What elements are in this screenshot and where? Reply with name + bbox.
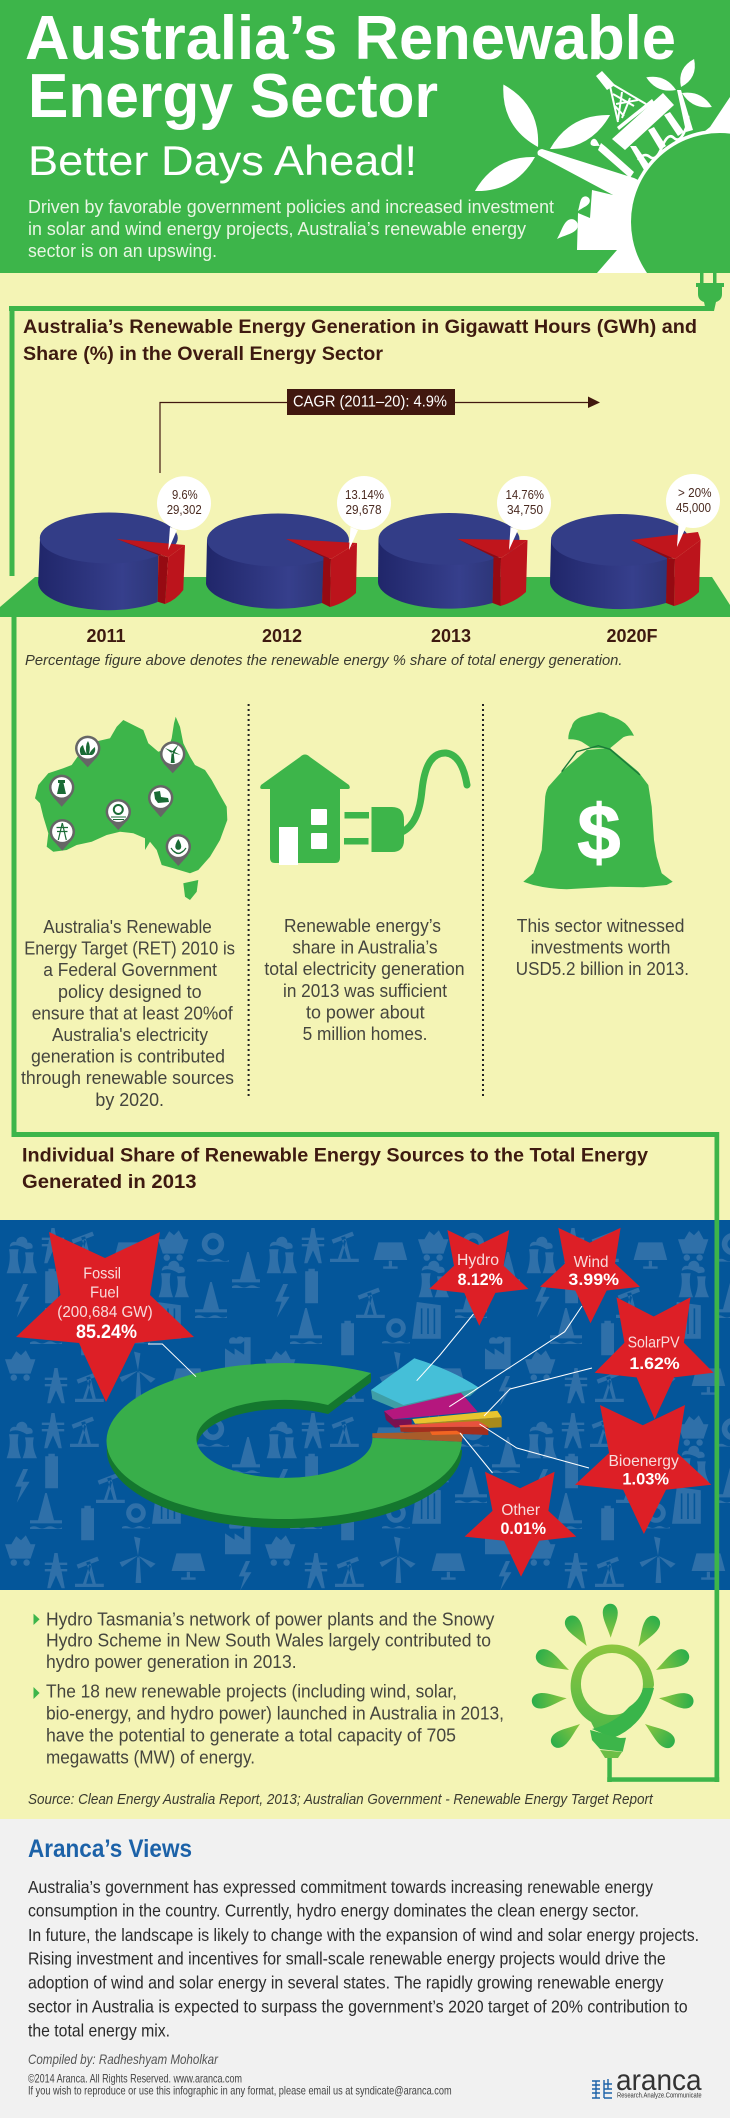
star: bioenergy: 1.03% [622,1469,669,1488]
intro text block: Driven by favorable government policies and increased investment [28,197,554,217]
icon: bullet arrow [34,1687,40,1699]
year labels: 2020F [606,626,658,646]
callout: 2020F value bubble: 45,000 [676,500,711,515]
star: fossil fuel [16,1232,194,1402]
callout: CAGR: CAGR (2011–20): 4.9% [293,394,447,410]
title [25,4,676,131]
text block: hydro bullet [34,1609,494,1672]
copyright: If you wish to reproduce or use this infographic in any format, please email us at syndicate@aranca.com [28,2084,452,2098]
callout: 2012 value bubble [337,476,391,550]
text block: Renewable Energy Target: ensure that at least 20%of [32,1003,234,1023]
chart: hydro slice [371,1358,479,1412]
pin: pylon [50,819,75,851]
text block: views paragraph: Australia’s government has expressed commitment towards increasing renewable energy [28,1877,653,1897]
icon: wind turbine tree on globe with oil rig [475,59,730,273]
star: hydro: Hydro [457,1252,499,1269]
logo: aranca: aranca [616,2064,702,2097]
year labels: 2012 [262,626,302,646]
text block: views paragraph: consumption in the country. Currently, hydro energy dominates the clean energy sector. [28,1901,639,1921]
text block: share of electricity: total electricity generation [264,959,465,979]
text block: Renewable Energy Target: a Federal Government [43,960,217,980]
text block: views paragraph: the total energy mix. [28,2020,170,2040]
callout: 2011 value bubble: 29,302 [167,502,202,517]
callout: 2020F value bubble: > 20% [678,485,712,500]
icon: house with plug [260,753,467,865]
callout: 2011 value bubble [157,476,211,550]
heading: individual share: Generated in 2013 [22,1172,196,1193]
text block: Renewable Energy Target: Australia's Renewable [43,917,212,937]
star: other [465,1472,576,1577]
text block: views paragraph: Rising investment and incentives for small-scale renewable energy projects would drive the [28,1949,666,1969]
arrow: CAGR growth arrow [160,396,600,473]
icon: bullet arrow [34,1614,40,1625]
chart: 2013 pie [378,476,551,609]
star: hydro: 8.12% [458,1270,503,1289]
year labels: 2011 [86,626,126,646]
year labels [86,626,658,646]
chart: other slice [372,1431,463,1442]
text block: investments: This sector witnessed [517,916,684,936]
text block: Renewable Energy Target: generation is contributed [31,1047,225,1067]
callout: 2012 value bubble: 29,678 [346,502,382,517]
text block: hydro bullet: Hydro Tasmania’s network of power plants and the Snowy [46,1609,494,1629]
star: wind: 3.99% [568,1270,619,1289]
icon: Australia map with energy pins [35,717,227,900]
star: solar PV: SolarPV [628,1335,680,1352]
intro text block [28,197,554,261]
callout: CAGR [287,389,455,415]
heading: generation chart: Share (%) in the Overall Energy Sector [23,344,384,365]
heading: generation chart: Australia’s Renewable Energy Generation in Gigawatt Hours (GWh) and [23,317,697,338]
text block: Renewable Energy Target [21,917,235,1110]
title: Australia’s Renewable [25,4,676,73]
intro text block: in solar and wind energy projects, Australia’s renewable energy [28,219,526,239]
copyright [28,2072,452,2098]
callout: 2012 value bubble: 13.14% [345,487,384,502]
icon: light bulb of leaves [531,1604,694,1758]
text block: share of electricity: to power about [306,1002,425,1022]
text block: projects bullet: have the potential to generate a total capacity of 705 [46,1726,456,1746]
star: other: Other [501,1502,541,1519]
source note: Source: Clean Energy Australia Report, 2013; Australian Government - Renewable Energy Target Report [28,1791,653,1808]
title: Energy Sector [28,62,438,131]
star: solar PV: 1.62% [629,1354,680,1373]
chart: bioenergy slice [399,1421,488,1435]
chart footnote: Percentage figure above denotes the renewable energy % share of total energy generation. [25,652,622,669]
compiled by: Compiled by: Radheshyam Moholkar [28,2051,219,2067]
pin: bioenergy leaf [75,736,100,767]
star: fossil fuel: (200,684 GW) [57,1304,153,1321]
subtitle: Better Days Ahead! [28,137,417,184]
text block: investments: USD5.2 billion in 2013. [516,959,689,979]
icon: money bag [523,712,673,889]
pin: chimney [49,775,74,807]
text block: Renewable Energy Target: Energy Target (RET) 2010 is [24,939,235,959]
text block: investments [516,916,689,979]
text block: hydro bullet: Hydro Scheme in New South Wales largely contributed to [46,1631,491,1651]
pin: hydro wheel [106,799,131,830]
chart: fossil fuel donut [107,1363,462,1528]
text block: Renewable Energy Target: Australia's electricity [52,1025,208,1045]
star: solar PV [595,1297,714,1419]
star: wind [540,1228,640,1323]
pin: solar [148,785,173,817]
star: other: 0.01% [500,1519,546,1538]
text block: Renewable Energy Target: by 2020. [95,1090,164,1110]
callout: 2011 value bubble: 9.6% [172,487,198,502]
text block: Renewable Energy Target: policy designed to [58,982,202,1002]
star: fossil fuel: Fossil [83,1265,121,1282]
heading: Aranca's Views: Aranca’s Views [28,1835,192,1863]
intro text block: sector is on an upswing. [28,241,217,261]
panel: header banner [0,0,730,273]
copyright: ©2014 Aranca. All Rights Reserved. www.aranca.com [28,2072,242,2086]
text block: views paragraph: sector in Australia is expected to surpass the government’s 2020 target of 20% contribution to [28,1996,688,2016]
text block: views paragraph: adoption of wind and solar energy in several states. The rapidly growing renewable energy [28,1973,664,1993]
text block: hydro bullet: hydro power generation in 2013. [46,1652,297,1672]
leader lines [148,1306,592,1473]
text block: projects bullet: bio-energy, and hydro power) launched in Australia in 2013, [46,1704,504,1724]
text block: share of electricity: Renewable energy’s [284,916,441,936]
text block: share of electricity: share in Australia’s [292,938,438,958]
icon: money bag: $ [577,788,621,876]
text block: share of electricity: 5 million homes. [303,1024,427,1044]
callout: 2013 value bubble [497,476,551,550]
panel: Aranca's views [0,1819,730,2118]
star: bioenergy [575,1405,711,1534]
text block: share of electricity: in 2013 was sufficient [283,981,447,1001]
heading: generation chart [23,317,697,365]
text block: investments: investments worth [531,938,670,958]
text block: Renewable Energy Target: through renewable sources [21,1068,234,1088]
star: hydro [429,1230,528,1326]
chart: 2020F pie [550,474,720,609]
text block: projects bullet [34,1682,504,1767]
chart: 2012 pie [206,476,391,609]
star: wind: Wind [574,1254,608,1271]
logo: aranca [592,2064,702,2099]
logo: aranca: Research.Analyze.Communicate [617,2092,702,2099]
callout: 2020F value bubble [666,474,720,547]
star: fossil fuel: 85.24% [76,1322,137,1343]
pin: water drop [166,834,191,866]
heading: individual share [22,1146,648,1193]
year labels: 2013 [431,626,471,646]
text block: projects bullet: megawatts (MW) of energy. [46,1747,255,1767]
star: bioenergy: Bioenergy [608,1453,679,1470]
chart: wind slice [384,1393,478,1428]
heading: individual share: Individual Share of Renewable Energy Sources to the Total Energy [22,1146,648,1167]
icon: plug and power cord [9,273,724,1782]
callout: 2013 value bubble: 14.76% [506,487,544,502]
text block: views paragraph [28,1877,699,2040]
text block: share of electricity [264,916,465,1044]
callout: 2013 value bubble: 34,750 [507,502,543,517]
star: fossil fuel: Fuel [90,1285,119,1302]
panel: energy share chart on blue [0,1220,730,1590]
pin: wind turbine [160,741,185,773]
chart: 2011 pie [38,476,211,610]
green ground platform [0,577,730,617]
text block: projects bullet: The 18 new renewable projects (including wind, solar, [46,1682,457,1702]
chart: solar slice [412,1411,502,1428]
